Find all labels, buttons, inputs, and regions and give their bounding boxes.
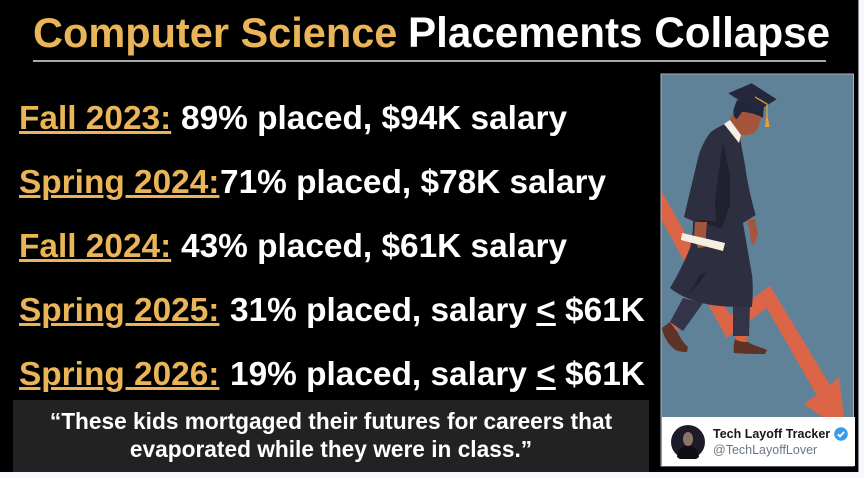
- stat row: Spring 2024: Spring 2024:: [19, 164, 219, 201]
- socks: [670, 322, 679, 332]
- stat row: Spring 2025: Spring 2025:: [19, 292, 219, 329]
- neck and face: [729, 112, 762, 141]
- stat row: Fall 2024: 43% placed, $61K salary: [181, 228, 567, 265]
- attribution card: [662, 417, 855, 466]
- collar: [724, 120, 741, 143]
- image panel background: [661, 74, 854, 466]
- stat row: Spring 2024: [19, 164, 606, 201]
- stat row: Fall 2023: 89% placed, $94K salary: [181, 100, 567, 137]
- stat row: Spring 2025: 31% placed, salary < $61K: [230, 292, 645, 329]
- tassel: [755, 97, 770, 127]
- mortarboard cap: [728, 83, 777, 112]
- gown: [670, 124, 756, 307]
- right shoe: [734, 339, 767, 354]
- hair and cap base: [733, 100, 764, 119]
- left shoe: [662, 322, 688, 352]
- avatar: [671, 425, 705, 459]
- right leg: [733, 306, 750, 336]
- gown hem fold: [684, 272, 706, 297]
- title: [33, 9, 830, 56]
- account name: Tech Layoff Tracker: [713, 427, 830, 441]
- hanging hand: [747, 219, 758, 245]
- title: Placements Collapse: [408, 9, 830, 56]
- stat row: Spring 2026: 19% placed, salary < $61K: [230, 356, 645, 393]
- title: Computer Science: [33, 9, 397, 56]
- holding hand: [694, 222, 707, 248]
- falling red arrow: [662, 191, 846, 433]
- verified badge: [834, 427, 848, 441]
- left leg: [670, 298, 703, 331]
- stat row: Spring 2026: Spring 2026:: [19, 356, 219, 393]
- stat row: Spring 2026: [19, 356, 645, 393]
- stat row: Spring 2025: [19, 292, 645, 329]
- diploma scroll: [681, 233, 725, 251]
- quote callout: evaporated while they were in class.”: [130, 436, 532, 462]
- stat row: Spring 2024: 71% placed, $78K salary: [220, 164, 606, 201]
- quote callout: “These kids mortgaged their futures for careers that: [50, 408, 612, 434]
- gown sleeve shade: [696, 143, 730, 228]
- graduate figure: [662, 83, 777, 354]
- stat row: Fall 2024: Fall 2024:: [19, 228, 171, 265]
- quote callout: [13, 400, 649, 472]
- stat row: Fall 2023: Fall 2023:: [19, 100, 171, 137]
- account handle: @TechLayoffLover: [713, 443, 817, 457]
